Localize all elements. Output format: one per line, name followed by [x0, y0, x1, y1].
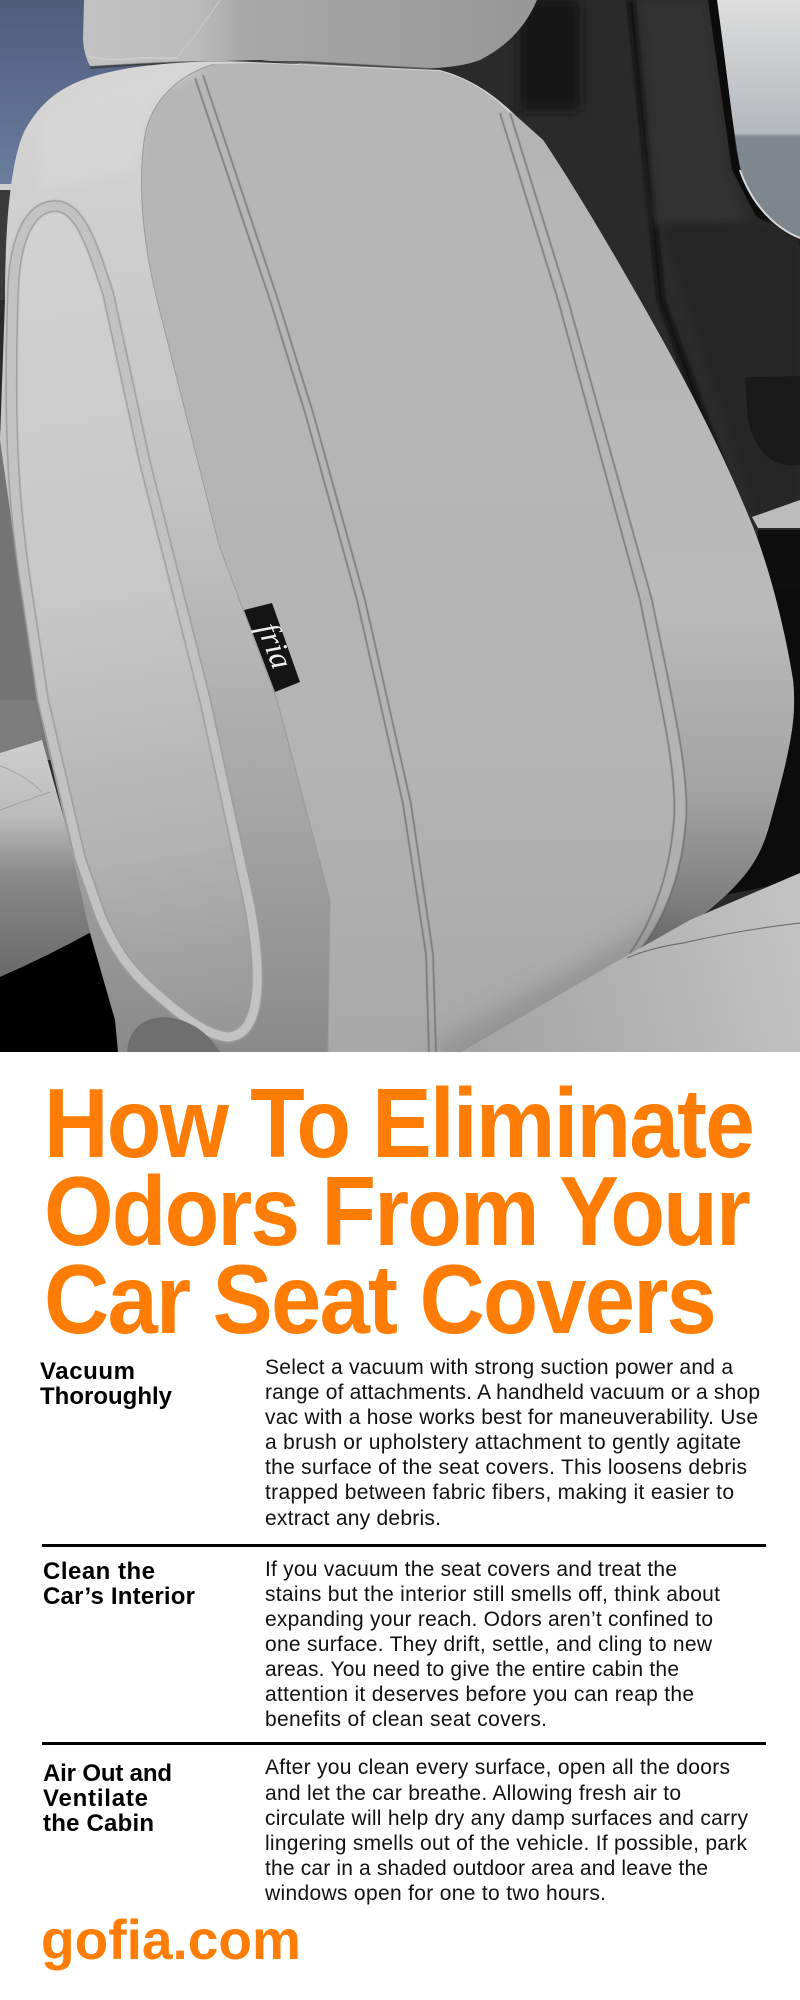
- title: [44, 1068, 753, 1354]
- fabric label: fria: [251, 618, 301, 674]
- headrest: [83, 0, 537, 70]
- body text: clean the car's interior: [265, 1558, 720, 1731]
- heading: air out and ventilate the cabin: Air Out and: [43, 1760, 172, 1787]
- body text: clean the car's interior: benefits of clean seat covers.: [265, 1708, 547, 1731]
- website footer: gofia.com: gofia.com: [41, 1908, 301, 1971]
- body text: air out and ventilate the cabin: After you clean every surface, open all the doors: [265, 1756, 730, 1779]
- body text: vacuum thoroughly: range of attachments. A handheld vacuum or a shop: [265, 1381, 760, 1404]
- body text: air out and ventilate the cabin: and let the car breathe. Allowing fresh air to: [265, 1782, 681, 1805]
- left double seam: [195, 75, 436, 1052]
- fabric label: [244, 603, 301, 692]
- title: How To Eliminate: [44, 1068, 753, 1178]
- central panel of seat back: [141, 63, 686, 1052]
- body text: air out and ventilate the cabin: [264, 1756, 748, 1905]
- heading: vacuum thoroughly: Thoroughly: [40, 1383, 173, 1410]
- seat back base shape: [0, 61, 794, 1052]
- heading: air out and ventilate the cabin: Ventilate: [43, 1785, 148, 1812]
- body text: vacuum thoroughly: Select a vacuum with strong suction power and a: [265, 1356, 733, 1379]
- seat cushion: [455, 873, 800, 1055]
- heading: clean the car's interior: Car’s Interior: [43, 1583, 195, 1610]
- body text: vacuum thoroughly: [265, 1356, 760, 1530]
- dark car interior: [0, 0, 800, 1052]
- window view at top right: [717, 0, 800, 238]
- body text: clean the car's interior: stains but the interior still smells off, think about: [265, 1583, 720, 1606]
- body text: vacuum thoroughly: trapped between fabric fibers, making it easier to: [265, 1481, 734, 1504]
- body text: vacuum thoroughly: a brush or upholstery attachment to gently agitate: [265, 1431, 741, 1454]
- heading: air out and ventilate the cabin: the Cabin: [43, 1810, 154, 1837]
- heading: clean the car's interior: Clean the: [43, 1558, 155, 1585]
- body text: clean the car's interior: attention it deserves before you can reap the: [265, 1683, 694, 1706]
- body text: clean the car's interior: one surface. They drift, settle, and cling to new: [265, 1633, 713, 1656]
- shoulder highlight: [178, 74, 194, 84]
- seat bracket at bottom: [127, 1017, 220, 1052]
- heading: air out and ventilate the cabin: [43, 1760, 172, 1837]
- right double seam: [500, 113, 686, 955]
- body text: air out and ventilate the cabin: the car in a shaded outdoor area and leave the: [265, 1857, 708, 1880]
- section: air out and ventilate the cabin: [43, 1756, 748, 1905]
- body text: vacuum thoroughly: the surface of the seat covers. This loosens debris: [265, 1456, 747, 1479]
- shadow along the seat crease: [440, 922, 680, 1060]
- seat back: [0, 61, 794, 1060]
- heading: vacuum thoroughly: [40, 1358, 173, 1410]
- heading: clean the car's interior: [43, 1558, 195, 1610]
- body text: clean the car's interior: expanding your reach. Odors aren’t confined to: [265, 1608, 713, 1631]
- body text: clean the car's interior: areas. You need to give the entire cabin the: [265, 1658, 679, 1681]
- body text: vacuum thoroughly: vac with a hose works best for maneuverability. Use: [265, 1406, 758, 1429]
- heading: vacuum thoroughly: Vacuum: [40, 1358, 135, 1385]
- body text: air out and ventilate the cabin: windows open for one to two hours.: [264, 1882, 606, 1905]
- title: Car Seat Covers: [44, 1244, 715, 1354]
- title: Odors From Your: [44, 1156, 750, 1266]
- sky through left window: [0, 0, 150, 184]
- rear seat at left: [0, 430, 50, 760]
- body text: air out and ventilate the cabin: circulate will help dry any damp surfaces and carry: [265, 1807, 748, 1830]
- body text: clean the car's interior: If you vacuum the seat covers and treat the: [265, 1558, 677, 1581]
- right side panel of seat back: [510, 113, 794, 955]
- door armrest: [745, 376, 800, 590]
- body text: air out and ventilate the cabin: lingering smells out of the vehicle. If possible, park: [265, 1832, 748, 1855]
- seat side pad with piping: [11, 206, 257, 1037]
- photo: grey car seat with seat cover: [0, 0, 800, 1060]
- body text: vacuum thoroughly: extract any debris.: [265, 1507, 441, 1530]
- section: vacuum thoroughly: [40, 1356, 760, 1530]
- inner panel stitch: [141, 64, 330, 1052]
- left seat cushion: [0, 740, 95, 977]
- lower shadows: [0, 184, 800, 1052]
- section: clean the car's interior: [43, 1558, 720, 1731]
